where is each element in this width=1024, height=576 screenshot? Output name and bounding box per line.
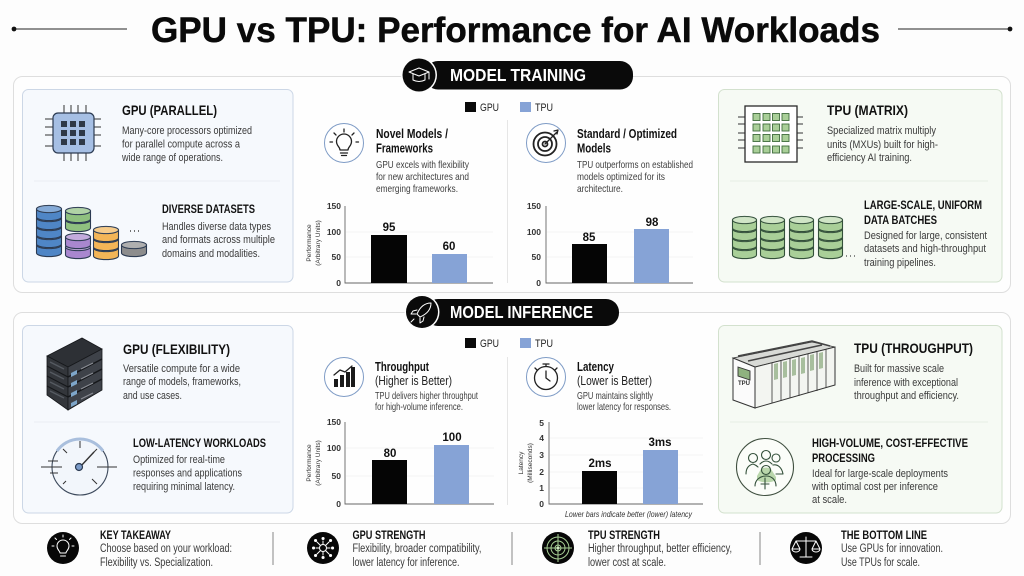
bar chart: latency: Latency	[518, 451, 525, 474]
legend: inference: GPU	[480, 338, 499, 350]
icon: server rack	[47, 338, 102, 410]
text: novel models description: emerging frameworks.	[376, 183, 458, 195]
card: GPU flexibility	[22, 326, 293, 513]
text: GPU flexibility description	[123, 363, 241, 402]
heading: novel models: Frameworks	[376, 142, 433, 156]
bar chart: latency: (Milliseconds)	[527, 443, 534, 483]
text: throughput description	[375, 390, 478, 413]
icon: people cost circle	[736, 438, 794, 496]
text: throughput description: TPU delivers higher throughput	[375, 390, 478, 402]
panel: model inference	[14, 294, 1010, 524]
icon: rising bar chart	[324, 358, 364, 396]
bar chart: throughput: 50	[332, 471, 341, 481]
title: GPU vs TPU: Performance for AI Workloads	[151, 11, 880, 50]
footer: GPU strength: Flexibility, broader compatibility,	[352, 543, 482, 555]
text: standard models description: TPU outperforms on established	[577, 159, 693, 171]
bar chart: novel models: 60	[443, 241, 455, 253]
heading: latency: Latency	[577, 360, 614, 374]
footer: TPU strength: TPU STRENGTH	[588, 530, 660, 542]
section header: model training	[401, 57, 633, 93]
bar chart: standard models: 85	[583, 232, 596, 244]
heading: TPU (THROUGHPUT): TPU (THROUGHPUT)	[854, 340, 973, 356]
footer: GPU strength: lower latency for inference.	[352, 557, 460, 569]
text: latency description: lower latency for responses.	[577, 401, 671, 413]
text: diverse datasets description: and formats across multiple	[162, 234, 275, 246]
icon: network badge	[307, 532, 339, 564]
bar chart: throughput: 100	[327, 443, 341, 453]
icon: GPU chip	[45, 105, 101, 161]
bar chart: throughput: 100	[442, 432, 462, 444]
legend: inference	[465, 338, 553, 350]
bar chart: standard models: 150	[527, 201, 541, 211]
text: novel models description	[376, 159, 470, 195]
text: TPU throughput description	[854, 363, 959, 402]
footer: TPU strength: lower cost at scale.	[588, 557, 666, 569]
card: GPU parallel	[22, 90, 293, 282]
text: TPU matrix description: Specialized matrix multiply	[827, 125, 936, 137]
text: GPU parallel description: for parallel compute across a	[122, 138, 241, 150]
legend: inference: TPU	[535, 338, 553, 350]
footer: TPU strength	[542, 530, 732, 569]
icon: speedometer gauge	[41, 439, 117, 495]
bar chart: throughput: 150	[327, 417, 341, 427]
bar chart: standard models: 0	[536, 278, 541, 288]
bar chart: latency: 3ms	[648, 437, 672, 449]
caption: latency note: Lower bars indicate better (lower) latency	[565, 509, 693, 519]
heading: GPU (PARALLEL): GPU (PARALLEL)	[122, 102, 217, 118]
heading: standard models	[577, 127, 677, 156]
heading: throughput	[375, 360, 452, 388]
heading: TPU (MATRIX): TPU (MATRIX)	[827, 102, 908, 118]
heading: standard models: Models	[577, 142, 611, 156]
text: standard models description	[577, 159, 693, 195]
legend: training: GPU	[480, 102, 499, 114]
text: low-latency description	[133, 454, 242, 493]
icon: balance scale badge	[790, 532, 822, 564]
text: GPU flexibility description: and use cases.	[123, 390, 182, 402]
legend: training	[465, 102, 553, 114]
card: TPU matrix	[718, 90, 1002, 282]
bar chart: standard models: 100	[527, 227, 541, 237]
bar chart: throughput: 0	[336, 499, 341, 509]
card: TPU throughput	[718, 326, 1002, 513]
text: latency description: GPU maintains slightly	[577, 390, 654, 402]
footer: the bottom line: THE BOTTOM LINE	[841, 530, 927, 542]
text: low-latency description: requiring minimal latency.	[133, 481, 235, 493]
heading: high-volume processing: PROCESSING	[812, 453, 875, 465]
text: diverse datasets description: domains and modalities.	[162, 248, 260, 260]
icon: green target badge	[542, 532, 574, 564]
text: TPU matrix description: units (MXUs) built for high-	[827, 139, 938, 151]
text: standard models description: models optimized for its	[577, 171, 665, 183]
text: high-volume description: at scale.	[812, 494, 847, 506]
text: novel models description: GPU excels with flexibility	[376, 159, 470, 171]
icon: stopwatch	[526, 358, 566, 396]
bar chart: novel models	[306, 201, 493, 288]
section header: model inference	[404, 294, 619, 330]
footer: GPU strength: GPU STRENGTH	[352, 530, 426, 542]
text: novel models description: for new architectures and	[376, 171, 469, 183]
heading: throughput: Throughput	[375, 360, 430, 374]
icon: TPU rack row	[733, 341, 835, 408]
text: low-latency description: responses and applications	[133, 468, 242, 480]
icon: uniform data batches	[732, 216, 855, 259]
heading: latency	[577, 360, 652, 388]
text: GPU flexibility description: Versatile compute for a wide	[123, 363, 240, 375]
text: data batches description: training pipelines.	[864, 257, 936, 269]
text: TPU matrix description	[827, 125, 938, 164]
section header: model training: MODEL TRAINING	[450, 65, 586, 85]
footer: GPU strength	[307, 530, 482, 569]
heading: large-scale uniform data batches	[864, 200, 982, 227]
bar chart: latency: 0	[539, 499, 544, 509]
icon: diverse dataset cylinders	[36, 205, 146, 260]
footer: the bottom line: Use GPUs for innovation.	[841, 543, 943, 555]
bar chart: latency	[518, 418, 703, 519]
text: GPU parallel description: Many-core processors optimized	[122, 125, 252, 137]
bar chart: throughput: 80	[384, 448, 396, 460]
heading: large-scale uniform data batches: DATA BATCHES	[864, 215, 937, 227]
text: diverse datasets description: Handles diverse data types	[162, 221, 271, 233]
bar chart: novel models: 100	[327, 227, 341, 237]
icon: target	[526, 124, 566, 162]
bar chart: novel models: (Arbitrary Units)	[315, 220, 322, 266]
panel: model training	[14, 57, 1010, 292]
bar chart: novel models: 50	[332, 252, 341, 262]
text: TPU matrix description: efficiency AI training.	[827, 152, 912, 164]
text: TPU throughput description: inference with exceptional	[854, 377, 958, 389]
block: throughput	[306, 358, 494, 509]
title ornament right	[898, 27, 1012, 31]
legend: training: TPU	[535, 102, 553, 114]
footer: the bottom line: Use TPUs for scale.	[841, 557, 920, 569]
heading: latency: (Lower is Better)	[577, 374, 652, 388]
bar chart: latency: 2ms	[588, 458, 612, 470]
footer: the bottom line	[790, 530, 943, 569]
text: high-volume description	[811, 468, 948, 506]
bar chart: latency: 4	[539, 433, 544, 443]
text: throughput description: for high-volume inference.	[375, 401, 463, 413]
text: TPU throughput description: Built for massive scale	[854, 363, 944, 375]
bar chart: throughput: Performance	[306, 444, 313, 482]
heading: novel models: Novel Models /	[376, 127, 448, 141]
text: high-volume description: Ideal for large-scale deployments	[812, 468, 948, 480]
heading: low-latency workloads: LOW-LATENCY WORKLOADS	[133, 438, 266, 450]
heading: GPU (FLEXIBILITY): GPU (FLEXIBILITY)	[123, 341, 230, 357]
block: novel models	[306, 124, 493, 288]
text: standard models description: architecture.	[577, 183, 623, 195]
bar chart: latency: 1	[539, 483, 544, 493]
bar chart: novel models: 0	[336, 278, 341, 288]
text: data batches description	[864, 230, 987, 269]
bar chart: standard models	[527, 201, 693, 288]
text: GPU parallel description: wide range of operations.	[121, 152, 223, 164]
block: latency	[518, 358, 703, 519]
text: GPU parallel description	[121, 125, 252, 164]
footer: TPU strength: Higher throughput, better efficiency,	[588, 543, 732, 555]
bar chart: novel models: 95	[383, 222, 396, 234]
bar chart: throughput	[306, 417, 494, 509]
footer: key takeaway: Flexibility vs. Specialization.	[100, 557, 213, 569]
heading: novel models	[376, 127, 448, 156]
icon: TPU matrix chip	[738, 106, 803, 162]
footer: key takeaway	[47, 530, 232, 569]
bar chart: standard models: 50	[532, 252, 541, 262]
text: GPU flexibility description: range of models, frameworks,	[123, 376, 241, 388]
footer: key takeaway: KEY TAKEAWAY	[100, 530, 171, 542]
text: latency description	[577, 390, 671, 413]
section header: model inference: MODEL INFERENCE	[450, 302, 593, 322]
text: high-volume description: with optimal cost per inference	[811, 481, 938, 493]
icon: bulb badge	[47, 532, 79, 564]
block: standard models	[526, 124, 693, 288]
text: data batches description: Designed for large, consistent	[864, 230, 987, 242]
text: diverse datasets description	[162, 221, 275, 260]
heading: standard models: Standard / Optimized	[577, 127, 677, 141]
text: TPU throughput description: throughput and efficiency.	[854, 390, 959, 402]
heading: high-volume processing: HIGH-VOLUME, COST-EFFECTIVE	[812, 438, 968, 450]
bar chart: throughput: (Arbitrary Units)	[315, 440, 322, 486]
bar chart: latency: 5	[539, 418, 544, 428]
bar chart: latency: 2	[539, 467, 544, 477]
text: low-latency description: Optimized for real-time	[133, 454, 225, 466]
heading: diverse datasets: DIVERSE DATASETS	[162, 204, 255, 216]
bar chart: novel models: Performance	[306, 224, 313, 262]
text: data batches description: datasets and high-throughput	[864, 243, 986, 255]
icon: light bulb	[324, 124, 364, 162]
heading: throughput: (Higher is Better)	[375, 374, 452, 388]
bar chart: latency: 3	[539, 450, 544, 460]
footer: key takeaway: Choose based on your workload:	[100, 543, 232, 555]
icon: TPU rack row: TPU	[738, 381, 750, 387]
heading: high-volume processing	[812, 438, 968, 465]
bar chart: standard models: 98	[646, 217, 659, 229]
title ornament left	[12, 27, 127, 31]
heading: large-scale uniform data batches: LARGE-SCALE, UNIFORM	[864, 200, 982, 212]
bar chart: novel models: 150	[327, 201, 341, 211]
